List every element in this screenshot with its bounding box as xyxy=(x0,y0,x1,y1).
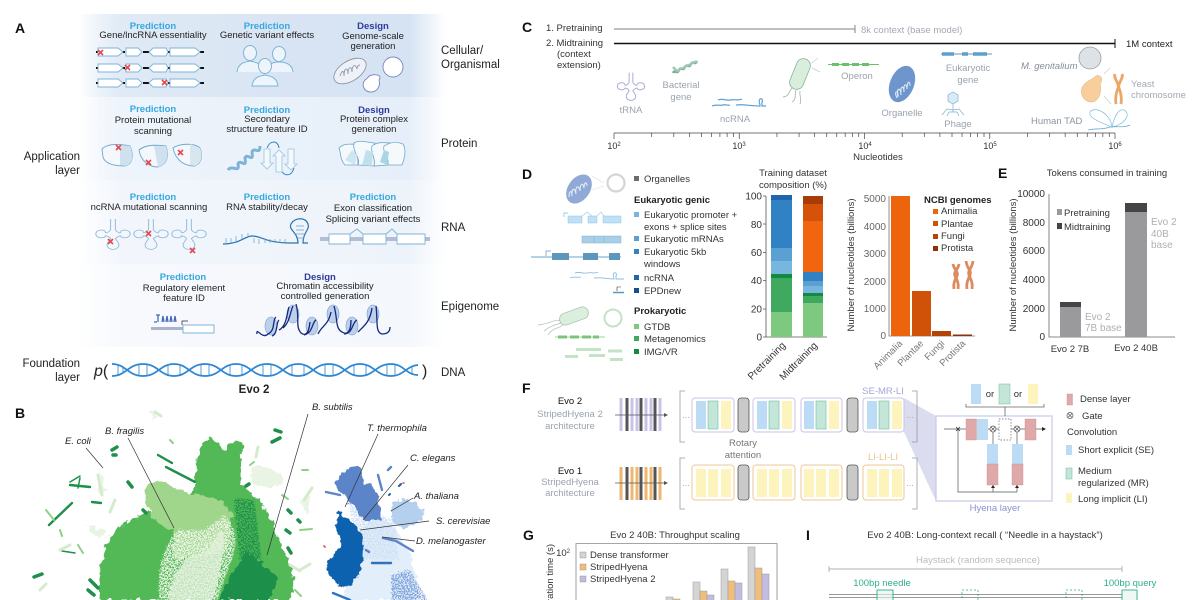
ellipsis marks xyxy=(682,410,914,488)
icon: human TAD xyxy=(1088,110,1130,130)
bar chart: tokens: Evo 2 7B xyxy=(1051,344,1089,355)
bar chart: tokens xyxy=(1008,189,1177,355)
bar chart: NCBI genomes: Protista xyxy=(938,338,969,369)
heading: mutational scanning xyxy=(115,104,191,137)
labels: training stages: extension) xyxy=(557,60,601,71)
bar chart: tokens: 10000 xyxy=(1017,189,1045,200)
bar chart: NCBI genomes xyxy=(846,194,992,372)
icon: ncRNA clovers xyxy=(96,219,206,253)
formula p(: p( xyxy=(93,363,109,380)
legend: dataset categories xyxy=(634,174,738,358)
chart axis: nucleotides: 10 xyxy=(1108,141,1118,151)
icon: protein scans xyxy=(102,144,202,167)
panel: C sequence scale xyxy=(522,19,1186,163)
legend: NCBI xyxy=(924,195,992,254)
panel: E tokens chart xyxy=(998,165,1177,355)
label: protein: Protein xyxy=(441,138,477,150)
label: yeast chromosome xyxy=(1131,79,1186,101)
bar chart: tokens: Number of nucleotides (billions) xyxy=(1008,198,1019,332)
bar chart: tokens: 2000 xyxy=(1023,304,1045,315)
legend: layers xyxy=(1066,394,1154,505)
heading: genome-scale generation: Design xyxy=(357,21,389,32)
legend: tokens xyxy=(1057,208,1110,233)
heading: protein complex: Design xyxy=(358,105,390,116)
legend: dataset categories: exons + splice sites xyxy=(644,222,727,233)
stacked bar chart: Midtraining xyxy=(778,340,820,383)
labels: needle and query: 100bp needle xyxy=(853,578,911,589)
bar chart: tokens: 4000 xyxy=(1023,275,1045,286)
label: human TAD: Human TAD xyxy=(1031,116,1083,127)
legend: tokens: Midtraining xyxy=(1064,222,1110,233)
species labels and leader lines xyxy=(65,402,490,555)
panel: G throughput xyxy=(523,527,777,600)
row background: protein xyxy=(78,97,446,180)
options row: or xyxy=(986,389,994,400)
heading: genome-scale generation: generation xyxy=(351,41,395,52)
labels: training stages: (context xyxy=(557,49,591,60)
chart axis: nucleotides: 6 xyxy=(1118,142,1122,148)
species labels and leader lines: E. coli xyxy=(65,436,92,447)
chart axis: nucleotides: 2 xyxy=(617,142,621,148)
heading: variant effects: Prediction xyxy=(244,21,290,32)
label: yeast chromosome: Yeast xyxy=(1131,79,1155,90)
chart: throughput bars xyxy=(545,544,777,600)
panel: F architecture xyxy=(522,380,1154,514)
labels: training stages: 1. Pretraining xyxy=(546,23,603,34)
icon: gene knockouts xyxy=(96,48,204,87)
heading: exon classification: Exon classification xyxy=(334,203,412,214)
heading: RNA stability: Prediction xyxy=(244,192,290,203)
stacked bar chart: 0 xyxy=(756,332,762,344)
label: application layer: Application xyxy=(24,151,80,163)
chart axis: nucleotides: 5 xyxy=(993,142,997,148)
heading: mutational scanning: Prediction xyxy=(130,104,176,115)
panel letter C: C xyxy=(522,19,532,35)
icon: ncRNA xyxy=(712,99,766,106)
stacked bar chart: 60 xyxy=(751,248,762,259)
panel letter F: F xyxy=(522,380,531,396)
legend: dataset categories: Eukaryotic genic xyxy=(634,195,710,206)
heading: secondary structure: Secondary xyxy=(244,114,290,125)
heading: genome-scale generation: Genome-scale xyxy=(342,31,404,42)
label: eukaryotic gene xyxy=(946,63,990,86)
diagram: Hyena layer: Hyena layer xyxy=(970,503,1020,514)
icon: motif and promoter xyxy=(151,315,214,333)
legend: dataset categories: IMG/VR xyxy=(644,347,678,358)
legend: dataset categories: Eukaryotic promoter + xyxy=(644,210,738,221)
species labels and leader lines: T. thermophila xyxy=(367,423,427,434)
icon: RNA stem loop xyxy=(223,219,308,244)
label: eukaryotic gene: gene xyxy=(957,75,979,86)
bar chart: tokens: Evo 2 xyxy=(1085,312,1111,323)
options row xyxy=(966,384,1044,416)
bar chart: tokens: 8000 xyxy=(1023,218,1045,229)
heading: exon classification xyxy=(326,192,421,225)
species labels and leader lines: A. thaliana xyxy=(413,491,459,502)
panel letter I: I xyxy=(806,527,810,543)
bar chart: tokens: 0 xyxy=(1039,332,1045,343)
labels: needle and query: 100bp query xyxy=(1104,578,1157,589)
legend: layers: Convolution xyxy=(1067,427,1117,438)
layer stack: SE-MR-LI: SE-MR-LI xyxy=(862,386,904,397)
label: haystack xyxy=(829,555,1122,572)
bar chart: NCBI genomes: 0 xyxy=(880,331,886,342)
chart axis: nucleotides: 10 xyxy=(858,141,868,151)
legend: dataset categories: Organelles xyxy=(644,174,690,185)
bar: midtraining context: 1M context xyxy=(1126,39,1173,50)
bar chart: NCBI genomes: 5000 xyxy=(864,194,886,205)
heading: regulatory element: feature ID xyxy=(163,293,205,304)
icon: DNA helix xyxy=(112,364,418,376)
legend: dataset categories: Eukaryotic 5kb xyxy=(644,247,706,258)
heading: protein complex xyxy=(340,105,408,135)
heading: gene essentiality: Prediction xyxy=(130,21,176,32)
layer stack: LI-LI-LI xyxy=(692,452,904,500)
panel: B UMAP xyxy=(15,402,490,600)
bar chart: tokens: 40B xyxy=(1151,229,1169,240)
bar chart: NCBI genomes: 2000 xyxy=(864,277,886,288)
heading: mutational scanning: Protein mutational xyxy=(115,115,191,126)
species labels and leader lines: D. melanogaster xyxy=(416,536,487,547)
icon: helix and sheets xyxy=(228,142,297,175)
legend: layers: Gate xyxy=(1082,411,1103,422)
label: Evo 2 architecture: StripedHyena 2 xyxy=(537,409,603,420)
heading: ncRNA scanning: Prediction xyxy=(130,192,176,203)
legend: NCBI: Plantae xyxy=(941,219,973,230)
legend: dataset categories: GTDB xyxy=(644,322,670,333)
heading: mutational scanning: scanning xyxy=(134,126,172,137)
options row: or xyxy=(1014,389,1022,400)
stacked bar chart xyxy=(745,192,827,383)
label: Evo 2 architecture: architecture xyxy=(545,421,595,432)
label: Evo 1 architecture xyxy=(541,466,599,499)
chart title: composition: composition (%) xyxy=(759,180,827,191)
legend: throughput xyxy=(580,550,669,585)
ellipsis marks: ... xyxy=(906,478,914,488)
heading: protein complex: Protein complex xyxy=(340,114,408,125)
legend: throughput: StripedHyena 2 xyxy=(590,574,655,585)
heading: gene essentiality: Gene/lncRNA essentiality xyxy=(99,30,207,41)
chart: throughput bars: 2 xyxy=(567,549,571,555)
panel: D dataset composition xyxy=(522,166,992,383)
heading: variant effects xyxy=(220,21,314,41)
heading: secondary structure xyxy=(226,105,308,135)
icon: phage xyxy=(942,92,964,116)
labels: training stages xyxy=(546,23,603,71)
label: organelle: Organelle xyxy=(881,108,923,119)
heading: protein complex: generation xyxy=(352,124,396,135)
bar chart: NCBI genomes: 1000 xyxy=(864,304,886,315)
chart axis: nucleotides: Nucleotides xyxy=(853,152,903,163)
bar: pretraining context: 8k context (base model) xyxy=(861,25,962,36)
chart title: composition: Training dataset xyxy=(759,168,827,179)
label: rotary attention: attention xyxy=(725,450,761,461)
label: cellular: Organismal xyxy=(441,59,500,71)
species labels and leader lines: B. subtilis xyxy=(312,402,353,413)
labels: training stages: 2. Midtraining xyxy=(546,38,603,49)
bar: midtraining xyxy=(803,196,823,337)
icon: tRNA xyxy=(617,73,645,100)
icon: bacterial gene xyxy=(673,61,697,73)
legend: dataset categories: Eukaryotic mRNAs xyxy=(644,234,724,245)
bar chart: NCBI genomes: 3000 xyxy=(864,249,886,260)
bar: pretraining context xyxy=(614,25,962,36)
legend: dataset categories: Metagenomics xyxy=(644,334,706,345)
row background: cellular xyxy=(78,14,446,97)
icon: people xyxy=(237,46,293,86)
sequence diagram xyxy=(829,590,1137,600)
legend: dataset categories: windows xyxy=(643,259,681,270)
stacked bar chart: 100 xyxy=(745,192,762,202)
label: ncRNA: ncRNA xyxy=(720,114,751,125)
species labels and leader lines: S. cerevisiae xyxy=(436,516,490,527)
layer stack: LI-LI-LI: LI-LI-LI xyxy=(868,452,898,463)
heading: secondary structure: structure feature ID xyxy=(226,124,308,135)
heading: regulatory element: Regulatory element xyxy=(143,283,226,294)
stacked bar chart: 40 xyxy=(751,276,762,287)
chart title: recall: Evo 2 40B: Long-context recall ( “Needle in a haystack”) xyxy=(867,530,1103,541)
label: Evo 2 architecture xyxy=(537,396,603,432)
ellipsis marks: ... xyxy=(682,410,690,420)
heading: regulatory element xyxy=(143,272,226,304)
label: bacterial gene: Bacterial xyxy=(663,80,699,91)
label: operon: Operon xyxy=(841,71,873,82)
icon: organelle xyxy=(884,62,920,106)
heading: chromatin accessibility: Chromatin accessibility xyxy=(276,281,374,292)
callout wedge xyxy=(904,398,936,501)
label: foundation layer: Foundation xyxy=(22,358,80,370)
heading: secondary structure: Prediction xyxy=(244,105,290,116)
label: Evo 1 architecture: Evo 1 xyxy=(558,466,582,477)
panel: A application layers xyxy=(15,14,500,396)
legend: layers: Medium xyxy=(1078,466,1112,477)
scatter: prokaryotic cluster xyxy=(34,410,312,600)
stacked bar chart: 20 xyxy=(751,304,762,316)
chart axis: nucleotides: 10 xyxy=(732,141,742,151)
heading: RNA stability xyxy=(226,192,308,213)
chart title: composition xyxy=(759,168,827,191)
bar chart: NCBI genomes: Animalia xyxy=(872,338,906,372)
label: DNA: DNA xyxy=(441,367,466,379)
chart title: throughput: Evo 2 40B: Throughput scaling xyxy=(610,530,740,541)
panel: I long-context recall xyxy=(806,527,1157,600)
brackets xyxy=(680,391,917,509)
heading: chromatin accessibility: controlled generation xyxy=(281,291,369,302)
label: rotary attention xyxy=(725,438,761,461)
heading: exon classification: Splicing variant effects xyxy=(326,214,421,225)
label: tRNA: tRNA xyxy=(620,105,643,116)
panel letter D: D xyxy=(522,166,532,182)
label: eukaryotic gene: Eukaryotic xyxy=(946,63,990,74)
ellipsis marks: ... xyxy=(906,410,914,420)
formula close: ) xyxy=(422,363,427,380)
legend: NCBI: Protista xyxy=(941,243,974,254)
row background: epigenome xyxy=(78,264,446,347)
icon: stripes evo 2 xyxy=(615,398,668,431)
heading: RNA stability: RNA stability/decay xyxy=(226,202,308,213)
legend: layers: regularized (MR) xyxy=(1078,478,1149,489)
icon: M. genitalium cell xyxy=(1079,47,1101,69)
label: Evo 1 architecture: architecture xyxy=(545,488,595,499)
label: bacterial gene xyxy=(663,80,699,103)
species labels and leader lines: B. fragilis xyxy=(105,426,144,437)
bar chart: NCBI genomes: Plantae xyxy=(896,338,926,369)
icon: stripes evo 1 xyxy=(615,467,668,500)
heading: genome-scale generation xyxy=(342,21,404,52)
label: Evo 1 architecture: StripedHyena xyxy=(541,477,599,488)
heading: ncRNA scanning: ncRNA mutational scanning xyxy=(91,202,207,213)
icons: dataset illustrations xyxy=(531,170,624,360)
chart axis: nucleotides: 3 xyxy=(742,142,746,148)
panel letter E: E xyxy=(998,165,1007,181)
species labels and leader lines: C. elegans xyxy=(410,453,456,464)
chart: throughput bars: 10 xyxy=(556,548,567,559)
heading: exon classification: Prediction xyxy=(350,192,396,203)
bar chart: tokens: 7B base xyxy=(1085,323,1122,334)
legend: layers: Short explicit (SE) xyxy=(1078,445,1154,456)
legend: dataset categories: ncRNA xyxy=(644,273,675,284)
label: haystack: Haystack (random sequence) xyxy=(916,555,1040,566)
icon: chromosomes xyxy=(953,261,973,289)
icon: exons xyxy=(320,229,430,244)
legend: throughput: StripedHyena xyxy=(590,562,648,573)
stacked bar chart: 80 xyxy=(751,220,762,231)
diagram: Hyena layer xyxy=(936,384,1052,514)
bar chart: tokens: Evo 2 40B xyxy=(1114,343,1158,354)
scatter: eukaryotic cluster xyxy=(324,467,428,600)
heading: gene essentiality xyxy=(99,21,207,41)
icon: organelle and yeast xyxy=(329,53,403,92)
panel letter G: G xyxy=(523,527,534,543)
icon: yeast and chromosome xyxy=(1081,68,1122,104)
chart axis: nucleotides: 4 xyxy=(868,142,872,148)
bar chart: NCBI genomes: Fungi xyxy=(923,338,947,363)
stacked bar chart: Pretraining xyxy=(746,340,788,382)
panel letter B: B xyxy=(15,405,25,421)
chart axis: nucleotides: 10 xyxy=(607,141,617,151)
chart axis: nucleotides xyxy=(607,133,1122,163)
heading: chromatin accessibility xyxy=(276,272,374,302)
icon: operon xyxy=(828,64,879,66)
legend: tokens: Pretraining xyxy=(1064,208,1110,219)
legend: throughput: Dense transformer xyxy=(590,550,669,561)
label: yeast chromosome: chromosome xyxy=(1131,90,1186,101)
panel letter A: A xyxy=(15,20,25,36)
label: foundation layer: layer xyxy=(55,372,80,384)
layer stack: SE-MR-LI xyxy=(692,386,904,432)
icon: bacterium xyxy=(783,57,820,104)
chart title: tokens: Tokens consumed in training xyxy=(1047,168,1167,179)
label: bacterial gene: gene xyxy=(670,92,692,103)
legend: layers: Long implicit (LI) xyxy=(1078,494,1148,505)
heading: variant effects: Genetic variant effects xyxy=(220,30,314,41)
heading: chromatin accessibility: Design xyxy=(304,272,336,283)
label: rotary attention: Rotary xyxy=(729,438,757,449)
icon: eukaryotic gene xyxy=(941,53,992,55)
legend: layers: Dense layer xyxy=(1080,394,1131,405)
ellipsis marks: ... xyxy=(682,478,690,488)
label: cellular: Cellular/ xyxy=(441,45,483,57)
legend: dataset categories: Prokaryotic xyxy=(634,306,686,317)
legend: NCBI: Animalia xyxy=(941,206,978,217)
heading: regulatory element: Prediction xyxy=(160,272,206,283)
legend: NCBI: Fungi xyxy=(941,231,965,242)
bar chart: NCBI genomes: 4000 xyxy=(864,222,886,233)
chart axis: nucleotides: 10 xyxy=(983,141,993,151)
label: Evo 2 architecture: Evo 2 xyxy=(558,396,582,407)
legend: dataset categories: EPDnew xyxy=(644,286,681,297)
bar chart: NCBI genomes: Number of nucleotides (billions) xyxy=(846,198,857,332)
label: application layer: layer xyxy=(55,165,80,177)
labels: needle and query xyxy=(853,578,1157,589)
icon: protein complex xyxy=(339,141,405,166)
label: epigenome: Epigenome xyxy=(441,301,499,313)
heading: ncRNA scanning xyxy=(91,192,207,213)
icon: nucleosomes xyxy=(257,304,390,336)
bar chart: tokens: Evo 2 xyxy=(1151,217,1177,228)
label: Evo 2: Evo 2 xyxy=(239,384,269,396)
label: RNA: RNA xyxy=(441,222,466,234)
bar chart: tokens: 6000 xyxy=(1023,246,1045,257)
legend: NCBI: NCBI genomes xyxy=(924,195,992,206)
bar chart: tokens: base xyxy=(1151,240,1173,251)
row background: RNA xyxy=(78,180,446,264)
label: phage: Phage xyxy=(944,119,972,130)
label: M. genitalium: M. genitalium xyxy=(1021,61,1078,72)
bar: pretraining xyxy=(771,195,792,337)
